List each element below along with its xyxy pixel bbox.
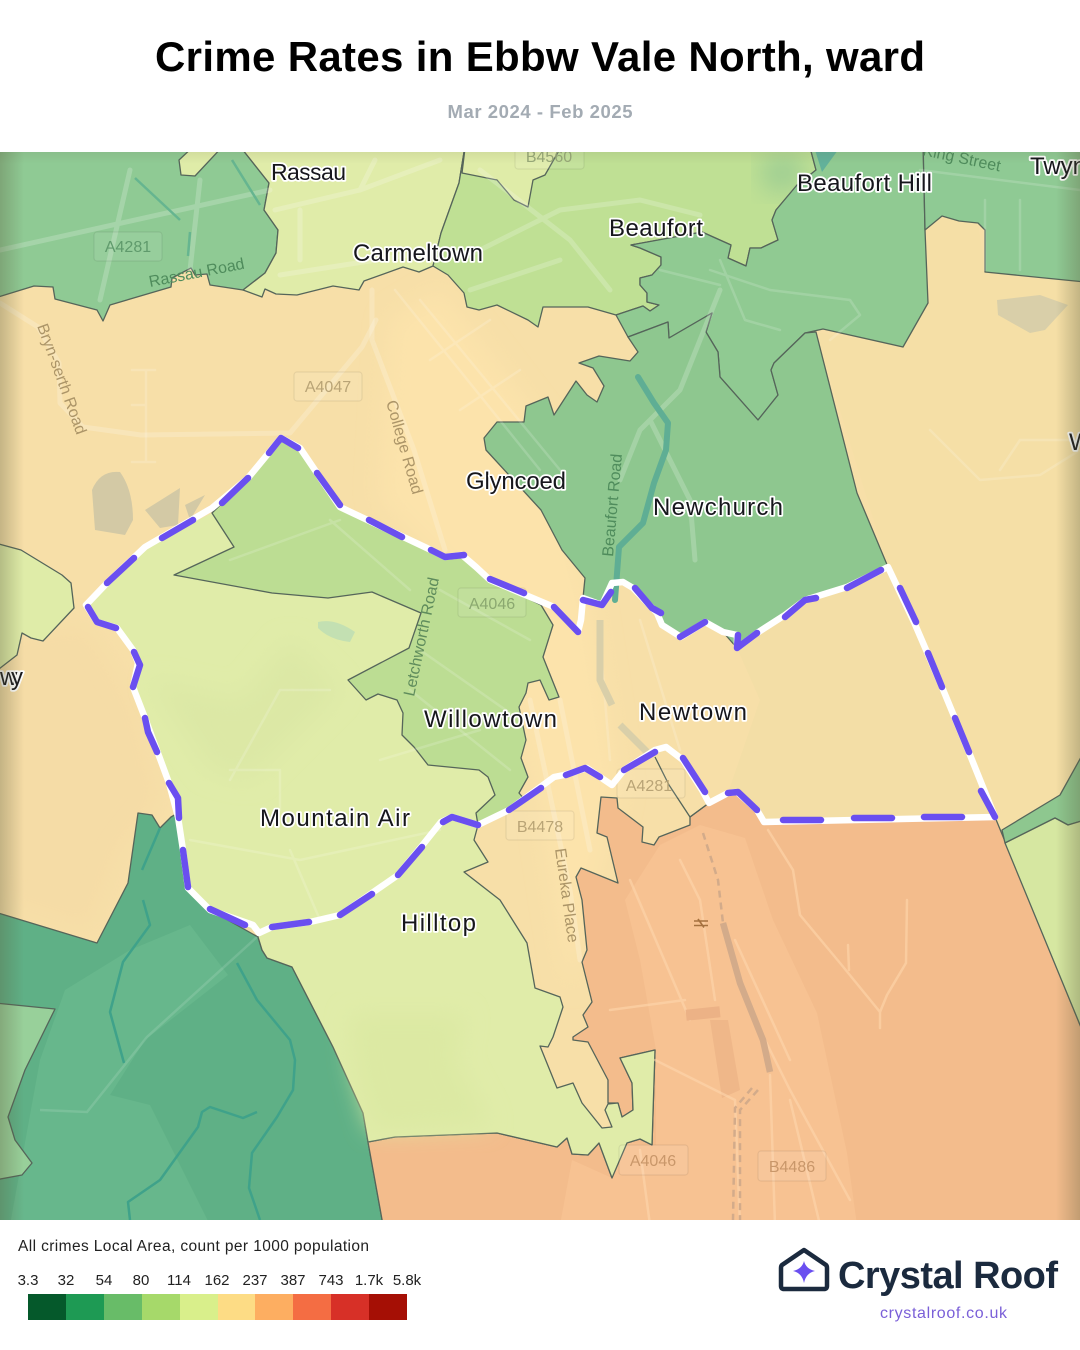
road shield: A4281 north-west: A4281 [105,239,151,256]
road shield: A4047: A4047 [305,379,351,396]
icon: house outline [781,1250,827,1289]
road shield: A4046 south [619,1145,688,1175]
road shield: B4486 [758,1151,826,1181]
legend scale numbers: 237 [242,1272,268,1289]
region: Beaufort Hill green [616,140,928,420]
ward white outline [86,438,995,933]
legend scale numbers [18,1272,422,1289]
road shield: A4046 south: A4046 [630,1153,676,1170]
building block in orange zone [686,1006,721,1021]
title: Crime Rates in Ebbw Vale North, ward [155,33,925,80]
road: orange-zone streets [610,860,850,1225]
water: south-west streams [110,828,295,1220]
region: top-left green [0,140,278,321]
region: darker blob near Beaufort Hill [760,150,805,195]
street label: Rassau Road: Rassau Road [148,256,246,291]
place: Hilltop: Hilltop [401,910,476,937]
place: Newtown: Newtown [639,699,747,726]
place: partial wy at the edge: wy [0,664,23,691]
map edge vignette [0,152,1080,1220]
region: small pale patch by Rassau [178,152,218,177]
legend scale numbers: 5.8k [393,1272,422,1289]
ward purple dashes [88,438,995,927]
road: College Road [372,290,445,550]
region: Rassau and Carmeltown pale green [242,152,464,298]
map base: mid-rate tan area [0,224,984,1128]
road shield: B4560: B4560 [526,149,572,166]
region: town darker orange block [710,1020,740,1098]
place: Mountain Air: Mountain Air [260,805,410,832]
place: Carmeltown: Carmeltown [353,240,483,267]
road: Eureka Place corridor [530,700,590,960]
tan tone variation: centre light [380,290,620,990]
road: Rassau streets [275,160,440,275]
road shield: A4047 [294,372,362,401]
region: east green band [1002,750,1080,843]
legend scale numbers: 743 [318,1272,344,1289]
region: top-right green [923,140,1080,282]
water: grey patches at reservoir [92,472,205,535]
place: Newchurch: Newchurch [653,494,783,521]
street label: Beaufort Road: Beaufort Road [600,453,626,557]
railway disused dashes [703,833,758,1220]
place labels [0,153,1080,937]
street label: King Street: King Street [921,142,1003,175]
date range subtitle: Mar 2024 - Feb 2025 [448,101,632,122]
railway line [723,923,770,1072]
legend colour ramp [28,1294,407,1320]
tan tone variation: Newtown east [728,567,995,822]
road: airfield stubs [132,370,155,462]
road shield: B4478 [506,811,574,840]
railway station icon [694,919,708,928]
website address: crystalroof.co.uk [880,1305,1008,1322]
road shield: A4281 south [617,769,685,798]
region: town lighter orange [611,1143,653,1179]
legend scale numbers: 162 [204,1272,230,1289]
street label: Eureka Place: Eureka Place [551,847,581,944]
place: Beaufort Hill: Beaufort Hill [797,170,932,197]
road shield: B4560 [515,140,584,169]
road shield: A4046 north: A4046 [469,596,515,613]
street label: Bryn-serth Road: Bryn-serth Road [33,322,89,437]
place: Willowtown: Willowtown [424,706,557,733]
road shield: B4486: B4486 [769,1159,815,1176]
road: A4047 corridor [0,303,376,435]
region: Willowtown light green [174,438,559,825]
region: Newchurch green [484,313,888,648]
water: river through Newchurch [615,377,668,600]
region: Hilltop shaded slope [336,1053,496,1142]
road shield: B4478: B4478 [517,819,563,836]
logo wordmark: Crystal Roof [838,1255,1058,1297]
map roads and streets [0,160,1080,1225]
water: pond in Mountain Air [318,621,355,642]
ward boundary [86,438,995,933]
street label: College Road: College Road [382,398,425,496]
road: south-west track [40,937,257,1112]
region: Ebbw Vale orange [368,792,1080,1225]
tan tone variation: west darker [0,625,160,930]
water: teal pool at top [816,152,836,172]
road: Beaufort Hill streets [660,170,1080,340]
place: Beaufort: Beaufort [609,215,703,242]
water: north-west stream [135,160,260,256]
road: Mountain Air streets [190,690,480,920]
road shield: A4046 north [458,588,526,617]
logo: Crystal Roof [781,1250,1058,1322]
legend [18,1238,422,1320]
icon: star sparkle [793,1261,815,1283]
road: town streets north [600,620,680,760]
place: Glyncoed: Glyncoed [466,468,566,495]
legend title: All crimes Local Area, count per 1000 population [18,1238,369,1255]
legend scale numbers: 32 [58,1272,74,1289]
water: grey river strip in Newtown [600,620,650,755]
road shield: A4281 north-west [94,232,162,261]
region: south-west lighter tone [10,925,228,1225]
place: Rassau: Rassau [271,159,346,185]
region: Mountain Air pale green [86,513,495,933]
road: Letchworth streets [230,520,530,770]
region: Hilltop pale green [258,817,655,1178]
boundary: town-centre inner line [655,757,709,817]
region: east pale green [1005,818,1080,1037]
road: Bryn Farm track [930,430,1080,480]
region: left pale patch [0,543,74,672]
legend scale numbers: 114 [167,1272,191,1289]
legend scale numbers: 80 [133,1272,149,1289]
road: Newchurch streets [620,290,720,560]
road: north-west streets [0,170,270,300]
road: forked moor track [768,830,907,1028]
legend scale numbers: 3.3 [18,1272,38,1289]
legend scale numbers: 1.7k [355,1272,384,1289]
road: Beaufort streets [460,170,700,290]
legend scale numbers: 387 [280,1272,306,1289]
region: pale patch at B4560 [461,152,559,208]
region: Mountain Air shaded moor [150,640,340,780]
road shield: A4281 south: A4281 [626,778,672,795]
region: south-west light green patch [0,1003,55,1180]
region: south-west dark green [0,813,383,1225]
region: Beaufort light green [433,140,816,327]
legend scale numbers: 54 [96,1272,112,1289]
tan tone variation: right moor [816,216,1080,1037]
street label: Letchworth Road: Letchworth Road [401,576,443,698]
road: Glyncoed streets [395,290,560,470]
water: grey patch at Twyn [997,295,1068,333]
